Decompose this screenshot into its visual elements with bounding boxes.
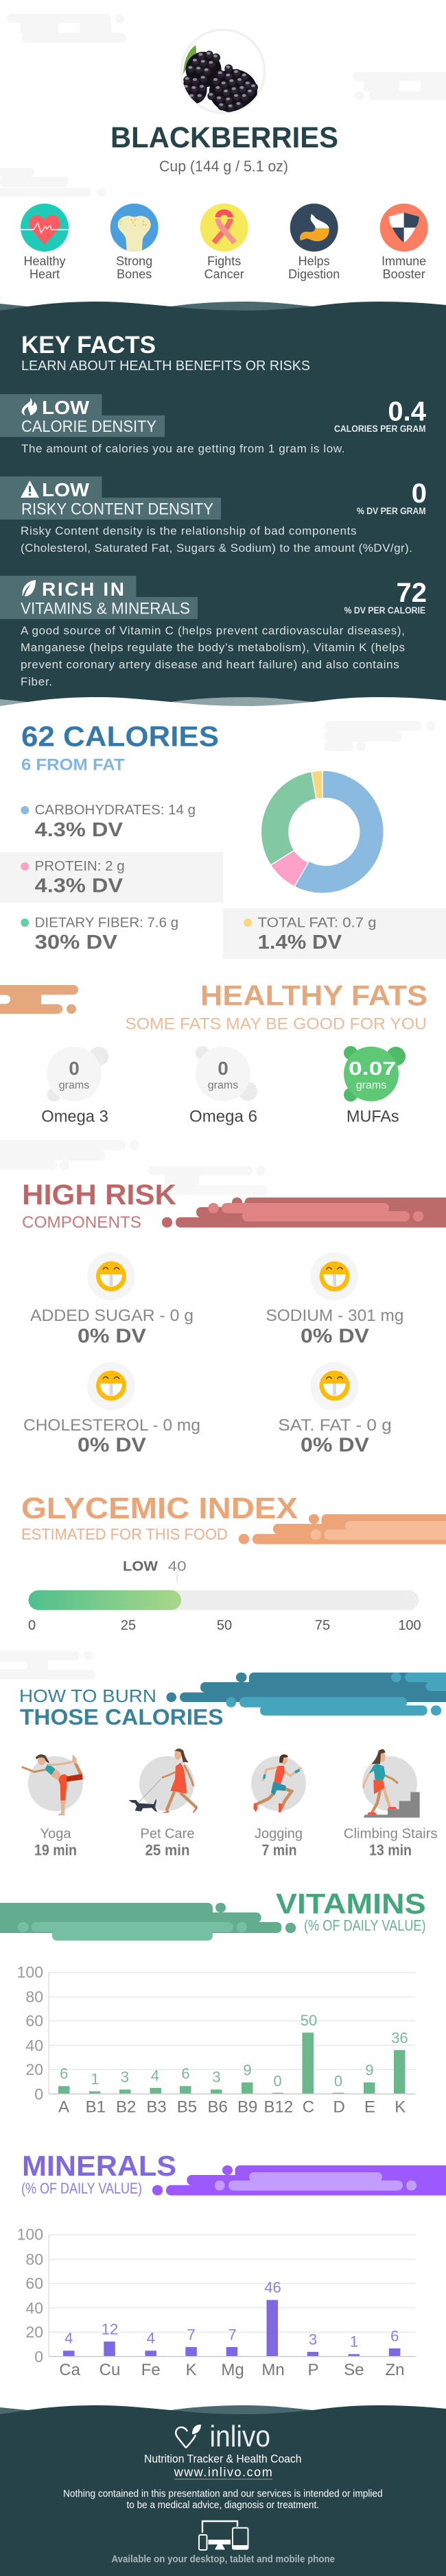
bar chart: vitamins: 20 (25, 2061, 43, 2078)
fat: omega 3 (41, 1047, 108, 1126)
legend: total fat: 1.4% DV (258, 932, 342, 953)
activity: jogging: Jogging (255, 1827, 303, 1842)
bar chart: minerals: 80 (25, 2250, 43, 2268)
icon: devices (199, 2521, 248, 2550)
heading: key facts: KEY FACTS (21, 332, 156, 359)
fat: omega 6: grams (208, 1080, 238, 1091)
fact: low risky content density: LOW (42, 479, 90, 500)
background cloud: calories (325, 721, 435, 751)
fat: omega 3: 0 (69, 1058, 80, 1079)
icon: strong bones: Strong (116, 254, 152, 268)
activity: yoga (22, 1754, 83, 1859)
icon: healthy heart: Heart (30, 267, 60, 281)
activity: yoga: Yoga (40, 1827, 71, 1842)
icon: helps digestion: Digestion (288, 267, 340, 281)
icon: helps digestion: Helps (298, 254, 330, 268)
bar chart: minerals: 46 (264, 2279, 281, 2296)
activity: climbing stairs: 13 min (369, 1842, 412, 1859)
background cloud: top right (353, 72, 446, 100)
gauge: glycemic value: 25 (121, 1618, 136, 1633)
legend: carbohydrates: 4.3% DV (35, 819, 124, 841)
fact: rich in vitamins and minerals: 72 (397, 578, 427, 608)
bar chart: vitamins: D (333, 2098, 345, 2117)
bar chart: minerals: 4 (147, 2329, 155, 2346)
bar chart: minerals: 40 (25, 2299, 43, 2317)
fact: low risky content density: % DV PER GRAM (357, 506, 425, 516)
subheading: healthy fats: SOME FATS MAY BE GOOD FOR YOU (125, 1015, 427, 1034)
heading: glycemic index: GLYCEMIC INDEX (21, 1492, 298, 1525)
decorative bars: burn calories (166, 1673, 446, 1716)
bar chart: minerals: Mn (261, 2361, 285, 2379)
fact: rich in vitamins and minerals: RICH IN (42, 579, 124, 600)
risk: saturated fat (278, 1362, 392, 1456)
bar chart: minerals: 100 (17, 2226, 43, 2244)
legend: carbohydrates: CARBOHYDRATES: 14 g (35, 803, 196, 818)
heading: calories: 62 CALORIES (21, 720, 219, 752)
gauge: glycemic value: LOW (123, 1559, 158, 1574)
fact: rich in vitamins and minerals: Manganese (helps regulate the body’s metabolism), Vitamin K (helps (21, 641, 405, 654)
risk: saturated fat: 0% DV (301, 1434, 370, 1456)
bar chart: vitamins: 9 (365, 2062, 374, 2079)
bar chart: vitamins: B5 (177, 2098, 197, 2117)
bar chart: vitamins: 36 (391, 2029, 408, 2046)
bar chart: minerals: 3 (309, 2331, 317, 2348)
fact: low calorie density: CALORIES PER GRAM (334, 424, 425, 434)
bar chart: vitamins: 40 (25, 2037, 43, 2054)
bar chart: vitamins: B1 (86, 2098, 106, 2117)
bar chart: vitamins: B12 (264, 2098, 293, 2117)
legend: dietary fiber (21, 916, 178, 953)
fact: rich in vitamins and minerals: A good source of Vitamin C (helps prevent cardiovascular diseases), (21, 624, 405, 637)
background clouds: high risk (0, 1140, 268, 1195)
background cloud: burn (0, 1651, 95, 1679)
fat: omega 6: Omega 6 (189, 1108, 257, 1126)
fat: mufas: MUFAs (347, 1108, 399, 1126)
leaf (183, 45, 196, 74)
bar chart: minerals: 60 (25, 2274, 43, 2292)
icon: immune booster: Booster (383, 267, 425, 281)
fat: omega 6: 0 (218, 1058, 228, 1079)
bar chart: vitamins: A (58, 2098, 69, 2117)
risk: added sugar: ADDED SUGAR - 0 g (30, 1307, 193, 1325)
icon: fights cancer: Fights (207, 254, 241, 268)
bar chart: minerals: Fe (141, 2361, 161, 2379)
bar chart: vitamins (17, 1963, 415, 2117)
risk: cholesterol: 0% DV (78, 1434, 147, 1456)
risk: sodium (266, 1252, 403, 1347)
bar chart: vitamins: E (364, 2098, 375, 2117)
bar chart: vitamins: 9 (243, 2062, 252, 2079)
bar chart: vitamins: B9 (237, 2098, 257, 2117)
bar chart: vitamins: 0 (334, 2072, 342, 2089)
bar chart: minerals (17, 2226, 415, 2379)
bar chart: vitamins: 100 (17, 1963, 43, 1981)
bar chart: minerals: 7 (228, 2326, 237, 2343)
fact: low calorie density: 0.4 (388, 396, 427, 426)
bar chart: vitamins: 4 (151, 2067, 159, 2084)
tagline: Nutrition Tracker & Health Coach (144, 2453, 302, 2466)
fact: rich in vitamins and minerals (0, 576, 427, 688)
bar chart: minerals: 4 (64, 2329, 73, 2346)
legend: dietary fiber: 30% DV (35, 932, 118, 953)
icon: immune booster (380, 204, 428, 281)
bar chart: minerals: 6 (390, 2328, 399, 2345)
heading: those calories: THOSE CALORIES (20, 1705, 224, 1729)
fat: omega 3: Omega 3 (41, 1108, 108, 1126)
activity: climbing stairs: Climbing Stairs (344, 1827, 438, 1842)
fact: low calorie density: LOW (42, 397, 90, 418)
bar chart: vitamins: 60 (25, 2012, 43, 2030)
legend: total fat: TOTAL FAT: 0.7 g (258, 916, 377, 931)
activity: pet care: 25 min (145, 1842, 189, 1859)
fact: rich in vitamins and minerals: Fiber. (21, 675, 52, 688)
logo: inlivo (176, 2420, 270, 2453)
fact: low risky content density: 0 (412, 478, 427, 509)
icon: strong bones: Bones (117, 267, 152, 281)
subheading: from fat: 6 FROM FAT (21, 755, 125, 774)
activity: jogging (251, 1754, 306, 1859)
risk: sodium: 0% DV (301, 1325, 370, 1347)
icon: fights cancer: Cancer (204, 267, 244, 281)
bar chart: minerals: Cu (99, 2361, 120, 2379)
risk: added sugar: 0% DV (78, 1325, 147, 1347)
fat: mufas: grams (356, 1080, 386, 1091)
decorative bars: minerals (152, 2165, 446, 2196)
legend: dietary fiber: DIETARY FIBER: 7.6 g (35, 916, 178, 931)
legend: carbohydrates (21, 803, 196, 841)
bar chart: vitamins: K (395, 2098, 406, 2117)
risk: saturated fat: SAT. FAT - 0 g (278, 1416, 392, 1435)
availability note: Available on your desktop, tablet and mobile phone (111, 2553, 335, 2565)
legend: total fat (223, 908, 446, 959)
risk: sodium: SODIUM - 301 mg (266, 1307, 403, 1325)
fat: omega 6 (189, 1046, 257, 1126)
subheading: components: COMPONENTS (22, 1213, 141, 1232)
bar chart: vitamins: 3 (121, 2069, 129, 2086)
legend: protein: PROTEIN: 2 g (35, 859, 125, 874)
panel: footer (0, 2405, 446, 2576)
risk: cholesterol: CHOLESTEROL - 0 mg (23, 1416, 200, 1435)
legend: protein (0, 852, 224, 903)
heading: minerals: MINERALS (22, 2150, 176, 2182)
icon: leaf (23, 580, 36, 596)
bar chart: minerals: Mg (221, 2361, 244, 2379)
background cloud: left of icons (0, 168, 106, 197)
icon: fights cancer (200, 204, 248, 281)
bar chart: vitamins: 1 (91, 2071, 99, 2088)
bar chart: minerals: 0 (34, 2348, 43, 2366)
bar chart: vitamins: B3 (146, 2098, 167, 2117)
logo: inlivo: inlivo (210, 2420, 270, 2453)
website: www.inlivo.com (174, 2466, 272, 2479)
decorative bars: glycemic (239, 1514, 446, 1544)
serving size: Cup (144 g / 5.1 oz) (159, 158, 288, 175)
bar chart: minerals: P (307, 2361, 319, 2379)
bar chart: minerals: 1 (350, 2333, 358, 2350)
title: BLACKBERRIES (110, 121, 338, 154)
bar chart: minerals: 20 (25, 2323, 43, 2341)
fact: low risky content density: RISKY CONTENT DENSITY (21, 500, 213, 518)
bar chart: vitamins: B6 (208, 2098, 228, 2117)
fat: mufas (344, 1046, 406, 1126)
heading: healthy fats: HEALTHY FATS (200, 980, 427, 1012)
donut chart (261, 770, 384, 893)
icon: flame (22, 398, 37, 415)
fat: mufas: 0.07 (349, 1058, 396, 1079)
decorative bars: high risk (162, 1198, 446, 1228)
bar chart: vitamins: C (303, 2098, 314, 2117)
heading: high risk: HIGH RISK (22, 1178, 176, 1211)
risk: added sugar (30, 1252, 193, 1347)
legend: protein: 4.3% DV (35, 875, 124, 897)
panel: key facts (0, 302, 446, 718)
gauge: glycemic value: 0 (28, 1618, 36, 1633)
fact: low risky content density: (Cholesterol, Saturated Fat, Sugars & Sodium) to the amount (%DV/gr). (21, 542, 412, 555)
disclaimer: to be a medical advice, diagnosis or treatment. (126, 2499, 319, 2511)
gauge: glycemic value: 75 (315, 1618, 330, 1633)
gauge: glycemic value: 40 (168, 1559, 187, 1574)
subheading: glycemic: ESTIMATED FOR THIS FOOD (21, 1525, 228, 1543)
activity: climbing stairs (344, 1749, 438, 1859)
icon: warning triangle (21, 481, 39, 498)
heading: vitamins: VITAMINS (276, 1888, 426, 1920)
bar chart: minerals: Se (344, 2361, 364, 2379)
icon: strong bones (110, 204, 159, 281)
drupelets (183, 51, 258, 112)
activity: pet care: Pet Care (141, 1827, 194, 1842)
activity: pet care (129, 1749, 198, 1859)
fact: low calorie density (0, 394, 427, 455)
subheading: LEARN ABOUT HEALTH BENEFITS OR RISKS (21, 359, 310, 374)
bar chart: vitamins: 0 (34, 2085, 43, 2103)
fact: low calorie density: CALORIE DENSITY (21, 417, 156, 436)
bar chart: minerals: Ca (59, 2361, 81, 2379)
icon: healthy heart (21, 204, 69, 281)
disclaimer: Nothing contained in this presentation and our services is intended or implied (63, 2488, 383, 2499)
icon: immune booster: Immune (382, 254, 426, 268)
bar chart: vitamins: 80 (25, 1988, 43, 2006)
fact: low risky content density: Risky Content density is the relationship of bad components (21, 524, 357, 537)
bar chart: minerals: 12 (102, 2321, 118, 2338)
bar chart: minerals: 7 (187, 2326, 196, 2343)
icon: healthy heart: Healthy (23, 254, 66, 268)
icon: helps digestion (288, 204, 340, 281)
decorative bars: vitamins (0, 1903, 296, 1941)
activity: yoga: 19 min (34, 1842, 77, 1859)
bar chart: vitamins: 6 (60, 2065, 68, 2082)
bar chart: vitamins: 0 (273, 2072, 282, 2089)
bar chart: vitamins: 3 (212, 2069, 221, 2086)
fact: low risky content density (0, 476, 427, 555)
bar chart: vitamins: 50 (301, 2012, 317, 2029)
fact: rich in vitamins and minerals: % DV PER CALORIE (344, 605, 425, 616)
subheading: minerals: (% OF DAILY VALUE) (21, 2180, 142, 2197)
heading: how to burn: HOW TO BURN (19, 1686, 156, 1706)
fact: rich in vitamins and minerals: VITAMINS & MINERALS (21, 599, 190, 618)
disclaimer (63, 2488, 383, 2511)
fact: rich in vitamins and minerals: prevent coronary artery disease and heart failure) and also contains (21, 658, 399, 671)
bar chart: minerals: K (186, 2361, 197, 2379)
berries base (182, 52, 257, 112)
fat: omega 3: grams (59, 1080, 89, 1091)
gauge: glycemic value: 100 (398, 1618, 421, 1633)
fact: low calorie density: The amount of calories you are getting from 1 gram is low. (21, 442, 344, 455)
decorative bars: healthy fats (0, 985, 78, 1014)
bar chart: vitamins: 6 (181, 2065, 190, 2082)
food photo: blackberries (181, 29, 265, 113)
background cloud: top left (7, 14, 126, 42)
activity: jogging: 7 min (262, 1842, 296, 1859)
gauge: glycemic value (28, 1559, 421, 1633)
gauge: glycemic value: 50 (217, 1618, 232, 1633)
bar chart: vitamins: B2 (116, 2098, 136, 2117)
bar chart: minerals: Zn (385, 2361, 405, 2379)
risk: cholesterol (23, 1362, 200, 1456)
